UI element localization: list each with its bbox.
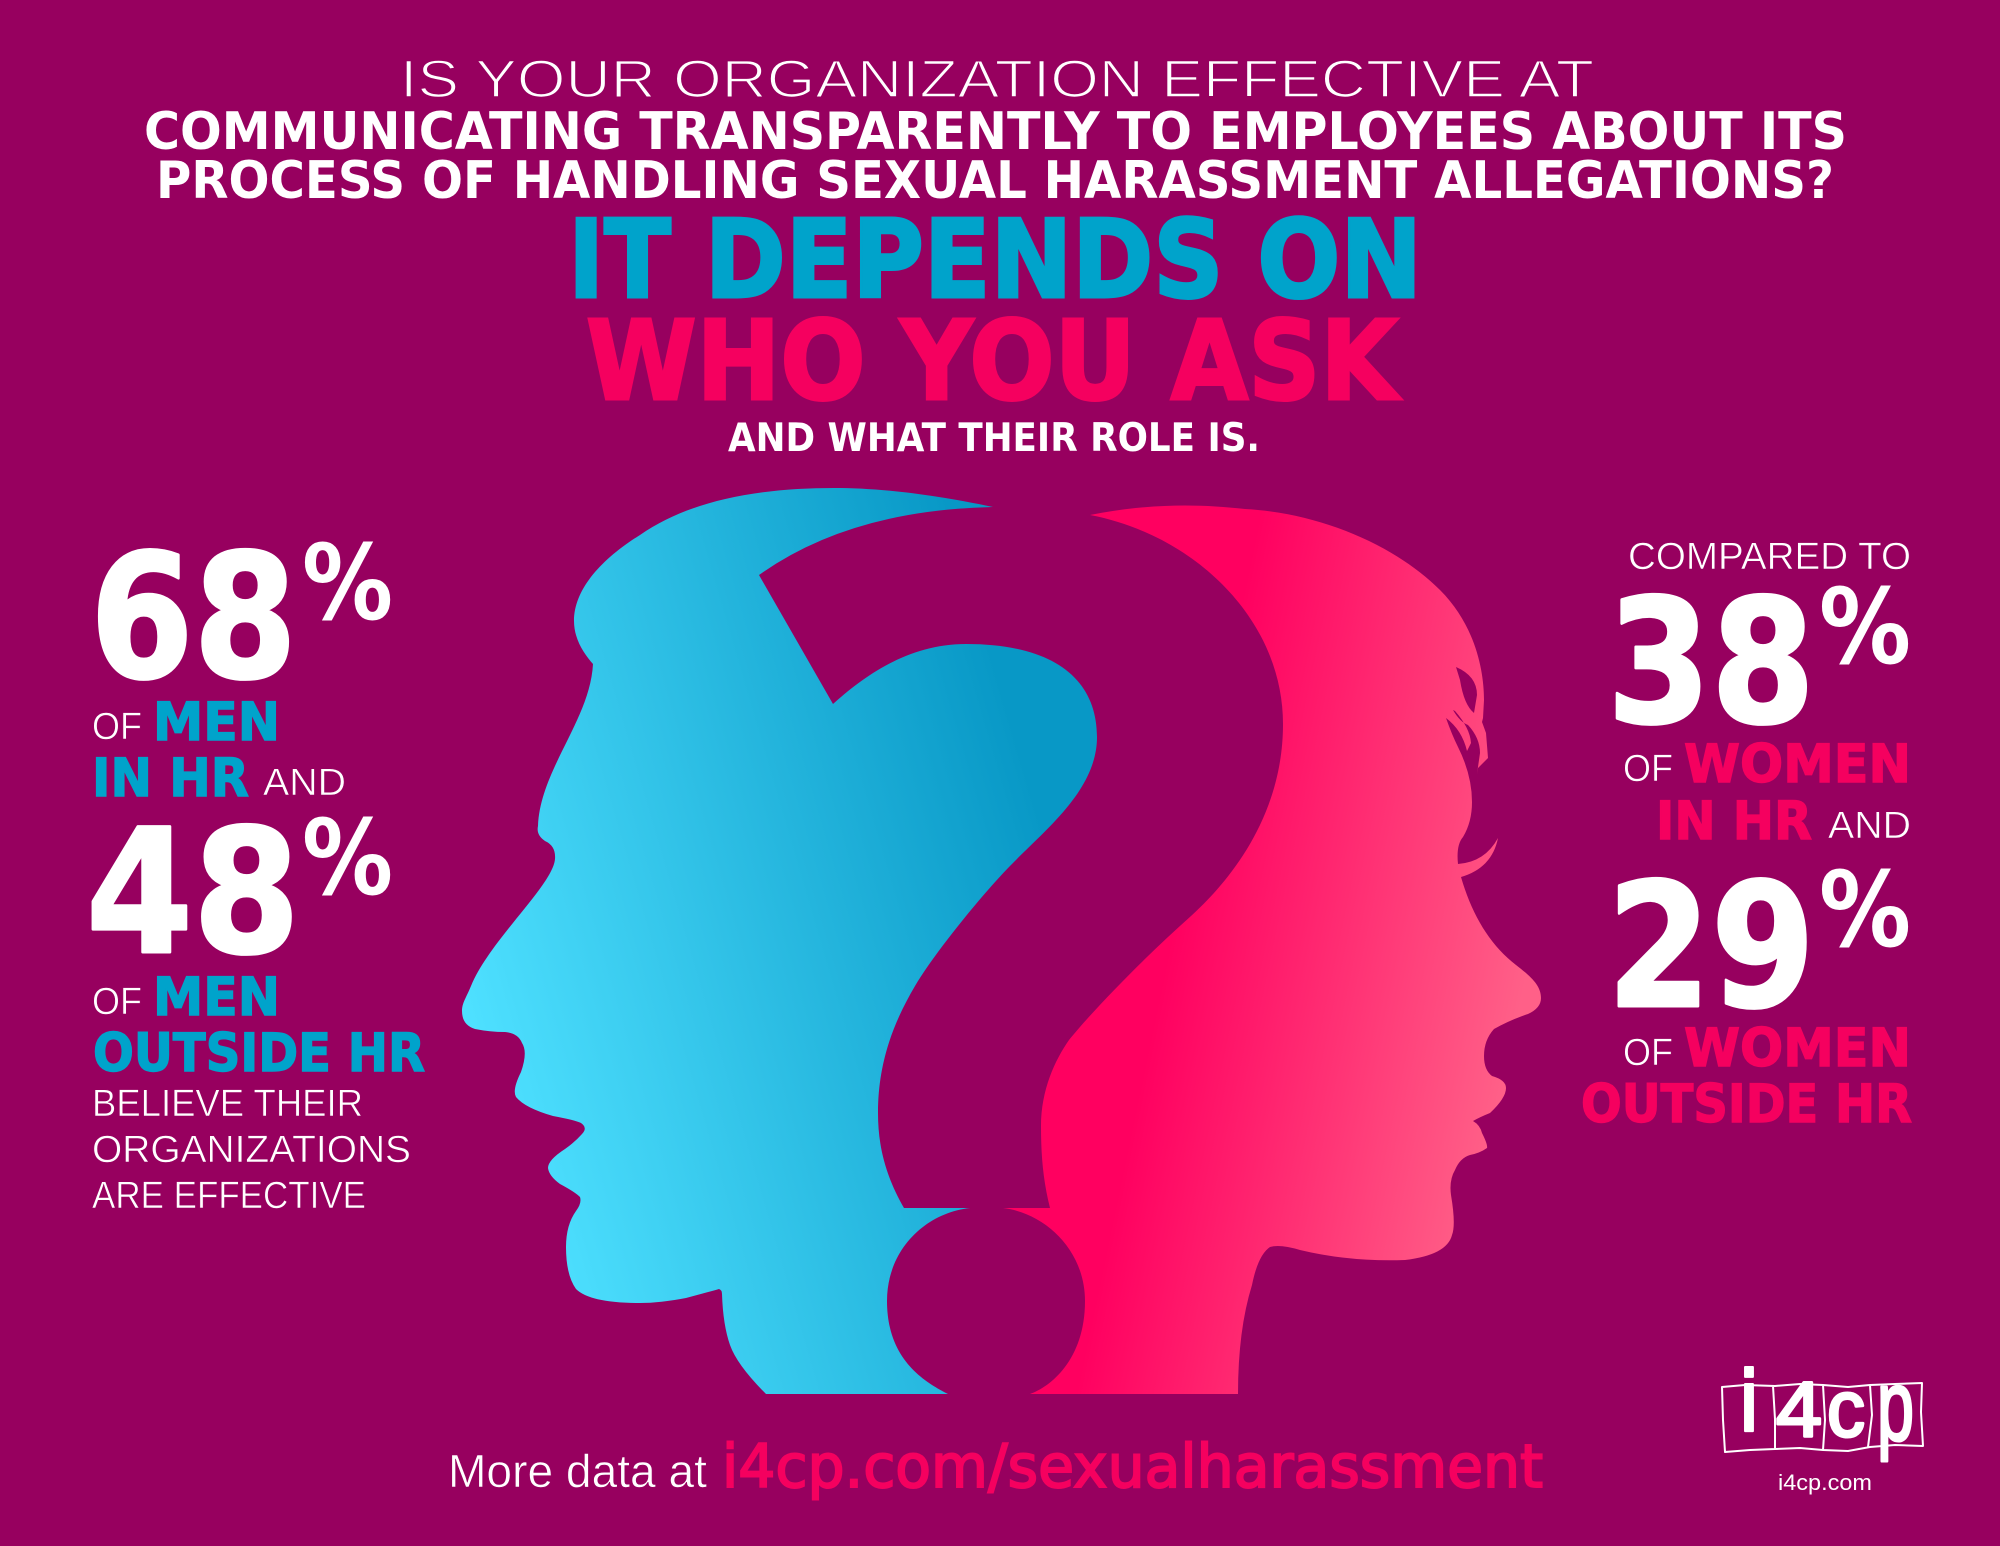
logo letters: c bbox=[1827, 1364, 1865, 1453]
label: of women in hr and: WOMEN bbox=[1684, 734, 1911, 795]
label: of men in hr and bbox=[92, 692, 346, 809]
text: believe their organizations are effective bbox=[92, 1083, 411, 1217]
stat: 38 percent: % bbox=[1819, 566, 1911, 688]
right stats panel: women bbox=[1581, 536, 1912, 1135]
label: of women outside hr: WOMEN bbox=[1684, 1018, 1911, 1079]
footer: more data link: More data at bbox=[448, 1445, 707, 1497]
label: of men in hr and: IN HR bbox=[92, 748, 249, 809]
stat: 68 percent: 68 bbox=[90, 517, 297, 718]
logo letters bbox=[1741, 1350, 1914, 1462]
label: of women in hr and: IN HR bbox=[1656, 791, 1812, 852]
label: of men outside hr: OF bbox=[92, 981, 142, 1023]
footer: more data link: i4cp.com/sexualharassment bbox=[722, 1432, 1543, 1502]
title line: communicating: COMMUNICATING TRANSPARENTLY TO EMPLOYEES ABOUT ITS bbox=[144, 102, 1847, 162]
label: of women in hr and: AND bbox=[1828, 805, 1911, 847]
stat: 38 percent: 38 bbox=[1607, 562, 1815, 763]
label: of men in hr and: AND bbox=[263, 762, 346, 804]
label: of women outside hr: OUTSIDE HR bbox=[1581, 1074, 1912, 1135]
text: believe their organizations are effective: BELIEVE THEIR bbox=[92, 1083, 363, 1125]
label: of men outside hr: OUTSIDE HR bbox=[93, 1023, 425, 1084]
label: of women outside hr: OF bbox=[1623, 1032, 1673, 1074]
stat: 68 percent: % bbox=[302, 522, 393, 644]
female head silhouette bbox=[1003, 505, 1541, 1394]
label: of men in hr and: MEN bbox=[153, 692, 280, 753]
logo box outline bbox=[1722, 1383, 1923, 1452]
text: compared to: COMPARED TO bbox=[1628, 536, 1911, 578]
male head silhouette bbox=[462, 488, 1097, 1394]
text: believe their organizations are effective: ARE EFFECTIVE bbox=[92, 1175, 366, 1217]
text: believe their organizations are effective: ORGANIZATIONS bbox=[92, 1129, 411, 1171]
stat: 48 percent: % bbox=[302, 797, 393, 919]
logo letters: p bbox=[1877, 1350, 1914, 1462]
label: of men in hr and: OF bbox=[92, 706, 142, 748]
logo url: i4cp.com bbox=[1778, 1470, 1872, 1495]
question mark heads illustration bbox=[462, 488, 1541, 1394]
logo: i4cp bbox=[1722, 1350, 1923, 1495]
label: of men outside hr bbox=[92, 967, 425, 1084]
stat: 48 percent: 48 bbox=[86, 792, 300, 993]
stat: 29 percent: % bbox=[1819, 849, 1911, 971]
stat: 29 percent: 29 bbox=[1607, 846, 1815, 1047]
left stats panel: men bbox=[86, 517, 425, 1217]
title line: process: PROCESS OF HANDLING SEXUAL HARASSMENT ALLEGATIONS? bbox=[156, 151, 1834, 211]
title line: question intro: IS YOUR ORGANIZATION EFFECTIVE AT bbox=[400, 50, 1594, 109]
label: of women in hr and: OF bbox=[1623, 748, 1673, 790]
headline: it depends on: IT DEPENDS ON bbox=[568, 198, 1422, 323]
label: of men outside hr: MEN bbox=[153, 967, 280, 1028]
logo letters: 4 bbox=[1776, 1365, 1822, 1453]
subhead: AND WHAT THEIR ROLE IS. bbox=[728, 416, 1260, 461]
headline: who you ask: WHO YOU ASK bbox=[586, 297, 1401, 425]
logo letters: i bbox=[1741, 1353, 1757, 1450]
label: of women outside hr bbox=[1581, 1018, 1912, 1135]
label: of women in hr and bbox=[1623, 734, 1911, 852]
title block bbox=[144, 50, 1847, 211]
